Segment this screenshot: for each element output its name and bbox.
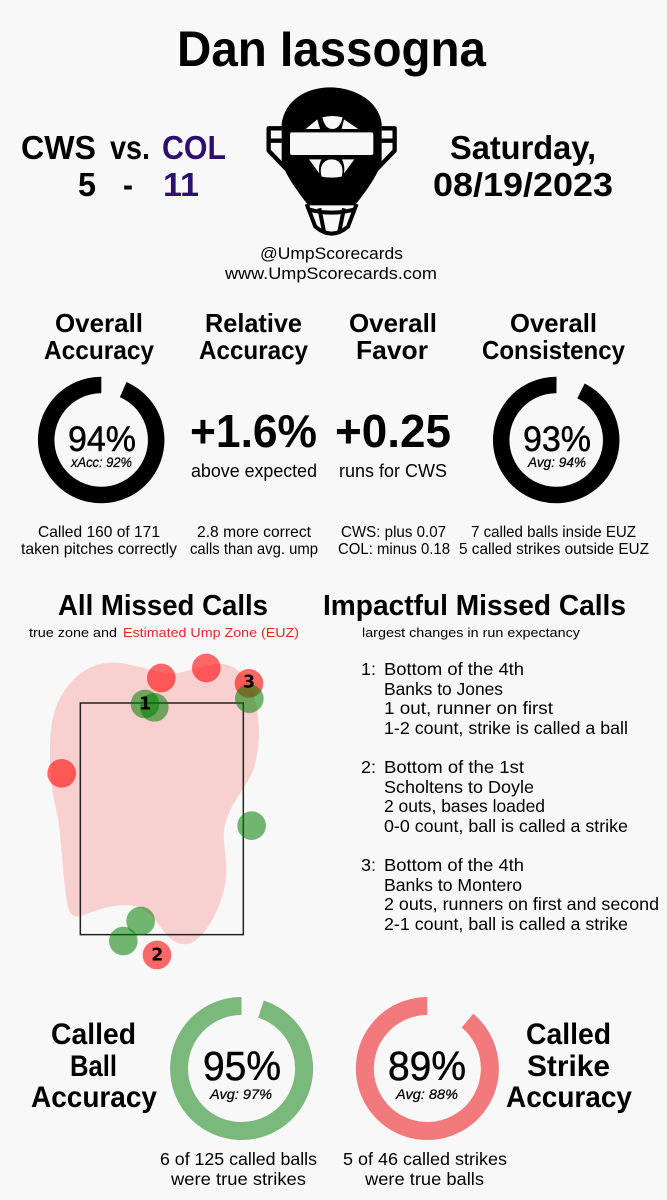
panel: called ball accuracy: Avg: 97%: [209, 1086, 272, 1102]
missed balls: [47, 654, 263, 969]
panel: overall favor: runs for CWS: [339, 461, 447, 481]
list: missed call 2: Scholtens to Doyle: [384, 777, 534, 797]
heading: all missed calls: true zone and: [29, 625, 117, 640]
heading: all missed calls: Estimated Ump Zone (EUZ): [123, 625, 299, 640]
panel: overall accuracy: xAcc: 92%: [70, 455, 132, 470]
date: 08/19/2023: [433, 166, 613, 203]
panel: overall consistency: [459, 308, 649, 558]
panel: overall accuracy: Overall: [55, 308, 143, 338]
panel: overall consistency: 7 called balls inside EUZ: [471, 524, 636, 541]
panel: called ball accuracy: were true strikes: [170, 1169, 306, 1189]
date: Saturday,: [450, 129, 596, 166]
panel: called strike accuracy: [343, 1006, 632, 1189]
list: missed call 2: Bottom of the 1st: [384, 757, 524, 777]
panel: called ball accuracy: 6 of 125 called balls: [160, 1149, 317, 1169]
panel: relative accuracy: calls than avg. ump: [190, 541, 318, 558]
panel: called ball accuracy: 95%: [203, 1043, 281, 1089]
list: missed call 1: 1:: [361, 659, 376, 679]
panel: called strike accuracy: 89%: [388, 1043, 466, 1089]
game score: vs.: [110, 129, 150, 166]
chart: strike zone plot: [47, 654, 266, 969]
site credits: @UmpScorecards: [260, 244, 403, 263]
list: missed call 3: [361, 855, 659, 934]
list: missed call 2: [361, 757, 628, 836]
heading: all missed calls: All Missed Calls: [58, 590, 268, 622]
game score: COL: [162, 129, 226, 166]
list: missed call 3: 2 outs, runners on first and second: [384, 894, 659, 914]
panel: overall favor: Overall: [349, 308, 437, 338]
missed strikes: [109, 684, 266, 955]
panel: overall consistency: Overall: [510, 308, 597, 338]
game score: 11: [163, 166, 199, 203]
heading: impactful missed calls: [323, 590, 626, 640]
panel: overall favor: +0.25: [335, 405, 451, 457]
ring: 95 percent: [179, 1006, 304, 1131]
list: missed call 3: 3:: [361, 855, 376, 875]
ring: 93 percent: [501, 385, 611, 495]
panel: relative accuracy: 2.8 more correct: [197, 524, 312, 541]
list: missed call 1: [361, 659, 628, 738]
panel: overall accuracy: Accuracy: [44, 335, 155, 365]
heading: impactful missed calls: largest changes in run expectancy: [362, 625, 581, 640]
pitch labels: 3: [243, 673, 255, 693]
panel: overall favor: Favor: [356, 335, 428, 365]
pitch labels: [139, 673, 255, 965]
game score: -: [123, 166, 133, 203]
panel: relative accuracy: Accuracy: [199, 335, 309, 365]
panel: called strike accuracy: Called: [526, 1018, 611, 1051]
panel: relative accuracy: +1.6%: [190, 405, 317, 457]
panel: overall favor: COL: minus 0.18: [338, 541, 450, 558]
heading: impactful missed calls: Impactful Missed Calls: [323, 590, 626, 622]
panel: overall favor: CWS: plus 0.07: [341, 524, 446, 541]
list: missed call 2: 0-0 count, ball is called a strike: [384, 816, 628, 836]
list: missed call 2: 2:: [361, 757, 376, 777]
site credits: www.UmpScorecards.com: [224, 264, 437, 283]
panel: relative accuracy: above expected: [191, 461, 317, 481]
panel: overall consistency: Consistency: [482, 335, 625, 365]
panel: called strike accuracy: Strike: [527, 1050, 610, 1083]
game score: [21, 129, 226, 203]
panel: called ball accuracy: Ball: [70, 1050, 117, 1083]
list: missed call 3: Bottom of the 4th: [384, 855, 524, 875]
list: missed call 1: 1-2 count, strike is called a ball: [384, 718, 628, 738]
list: missed call 1: Bottom of the 4th: [384, 659, 524, 679]
panel: called strike accuracy: Accuracy: [506, 1081, 632, 1114]
list: missed call 3: Banks to Montero: [384, 875, 522, 895]
panel: overall accuracy: 94%: [68, 420, 136, 459]
ring: 89 percent: [365, 1006, 490, 1131]
panel: overall accuracy: [21, 308, 177, 558]
panel: overall accuracy: taken pitches correctly: [21, 541, 177, 558]
ring: 94 percent: [46, 385, 156, 495]
list: missed call 3: 2-1 count, ball is called a strike: [384, 914, 628, 934]
list: missed call 2: 2 outs, bases loaded: [384, 796, 545, 816]
true strike zone: [80, 703, 243, 935]
panel: overall accuracy: Called 160 of 171: [38, 524, 160, 541]
panel: overall consistency: 93%: [523, 420, 591, 459]
title: Dan Iassogna: [177, 21, 487, 77]
panel: relative accuracy: [190, 308, 318, 558]
panel: called ball accuracy: Called: [51, 1018, 136, 1051]
date: [433, 129, 613, 203]
icon: umpire mask: [269, 87, 395, 234]
panel: called strike accuracy: were true balls: [364, 1169, 484, 1189]
heading: all missed calls: [29, 590, 299, 640]
panel: called strike accuracy: Avg: 88%: [395, 1086, 458, 1102]
panel: called ball accuracy: [31, 1006, 317, 1189]
panel: relative accuracy: Relative: [205, 308, 302, 338]
game score: 5: [78, 166, 96, 203]
panel: overall consistency: Avg: 94%: [527, 455, 586, 470]
panel: overall consistency: 5 called strikes outside EUZ: [459, 541, 649, 558]
pitch labels: 1: [139, 694, 151, 714]
game score: CWS: [21, 129, 96, 166]
list: missed call 1: 1 out, runner on first: [384, 698, 553, 718]
panel: overall favor: [335, 308, 451, 558]
list: missed call 1: Banks to Jones: [384, 679, 503, 699]
site credits: [224, 244, 437, 283]
panel: called ball accuracy: Accuracy: [31, 1081, 157, 1114]
estimated ump zone: [50, 663, 259, 944]
panel: called strike accuracy: 5 of 46 called strikes: [343, 1149, 507, 1169]
pitch labels: 2: [151, 945, 163, 965]
